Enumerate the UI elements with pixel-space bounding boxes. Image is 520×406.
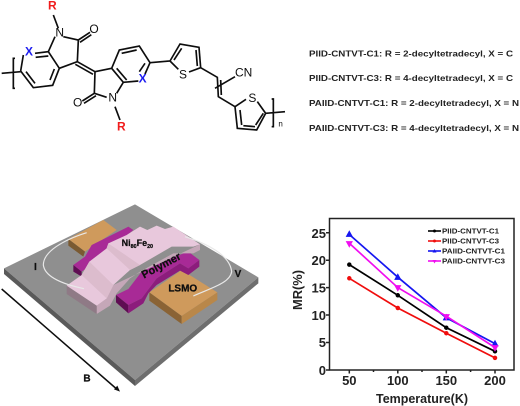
atom labels: CN bbox=[235, 65, 252, 79]
legend: PIID-CNTVT-C3 bbox=[442, 236, 499, 246]
legend: PIID-CNTVT-C1 bbox=[442, 226, 499, 236]
tick labels: 20 bbox=[312, 253, 326, 268]
polymer variant list: PAIID-CNTVT-C1: R = 2-decyltetradecyl, X = N bbox=[309, 98, 519, 108]
atom labels: O bbox=[89, 22, 99, 36]
tick labels: 15 bbox=[312, 280, 326, 296]
atom labels: O bbox=[73, 96, 82, 110]
R and X substituents bbox=[25, 0, 147, 134]
polymer variant list: PIID-CNTVT-C3: R = 4-decyltetradecyl, X = C bbox=[309, 73, 513, 83]
back polymer strip bbox=[73, 227, 133, 277]
atom labels: S bbox=[248, 91, 256, 105]
tick labels: 150 bbox=[435, 373, 457, 388]
polymer variant list: PAIID-CNTVT-C3: R = 4-decyltetradecyl, X = N bbox=[309, 123, 519, 133]
back LSMO electrode bbox=[68, 220, 117, 257]
tick labels: 100 bbox=[387, 373, 409, 388]
R and X substituents: X bbox=[25, 44, 33, 58]
series: PAIID-CNTVT-C3 bbox=[347, 242, 497, 350]
legend bbox=[428, 226, 505, 266]
polymer variant list bbox=[309, 48, 519, 133]
substrate plate bbox=[4, 204, 258, 386]
legend: PAIID-CNTVT-C3 bbox=[442, 256, 505, 266]
front LSMO electrode bbox=[149, 270, 217, 324]
chart axes bbox=[326, 218, 514, 374]
series: PIID-CNTVT-C1 bbox=[348, 263, 496, 353]
device labels: 80 bbox=[131, 244, 137, 250]
device schematic bbox=[2, 204, 258, 392]
atom labels: n bbox=[278, 120, 283, 129]
series: PAIID-CNTVT-C1 bbox=[347, 232, 497, 346]
series: PIID-CNTVT-C3 bbox=[348, 277, 496, 359]
device labels: I bbox=[34, 262, 37, 273]
NiFe electrode bbox=[67, 226, 200, 314]
device labels: B bbox=[83, 374, 91, 385]
axis titles: Temperature(K) bbox=[376, 391, 468, 406]
tick labels: 25 bbox=[312, 226, 326, 241]
device labels bbox=[34, 238, 242, 385]
R and X substituents: R bbox=[117, 120, 126, 134]
axis titles bbox=[290, 270, 468, 406]
atom labels: N bbox=[55, 26, 64, 40]
device labels: Polymer bbox=[140, 250, 184, 281]
polymer variant list: PIID-CNTVT-C1: R = 2-decyltetradecyl, X = C bbox=[309, 48, 513, 58]
R and X substituents: X bbox=[139, 72, 147, 86]
tick labels: 0 bbox=[319, 363, 326, 378]
arrow: magnetic field B bbox=[2, 289, 120, 392]
legend: PAIID-CNTVT-C1 bbox=[442, 246, 505, 256]
device labels: V bbox=[235, 269, 242, 280]
measurement wires bbox=[43, 233, 232, 296]
atom labels: S bbox=[179, 67, 187, 81]
tick labels bbox=[312, 226, 506, 388]
atom labels: N bbox=[108, 91, 117, 105]
chemical structure bbox=[2, 0, 285, 134]
tick labels: 50 bbox=[342, 373, 357, 388]
device labels: 20 bbox=[147, 244, 153, 250]
tick labels: 5 bbox=[319, 335, 326, 350]
line chart: MR vs temperature bbox=[290, 218, 514, 406]
device labels: LSMO bbox=[168, 284, 197, 295]
atom labels bbox=[55, 22, 283, 129]
axis titles: MR(%) bbox=[290, 270, 305, 310]
device labels: Fe bbox=[137, 238, 147, 248]
device labels: Ni bbox=[122, 238, 131, 248]
tick labels: 200 bbox=[484, 373, 506, 388]
front polymer strip bbox=[116, 252, 199, 313]
tick labels: 10 bbox=[312, 308, 326, 323]
